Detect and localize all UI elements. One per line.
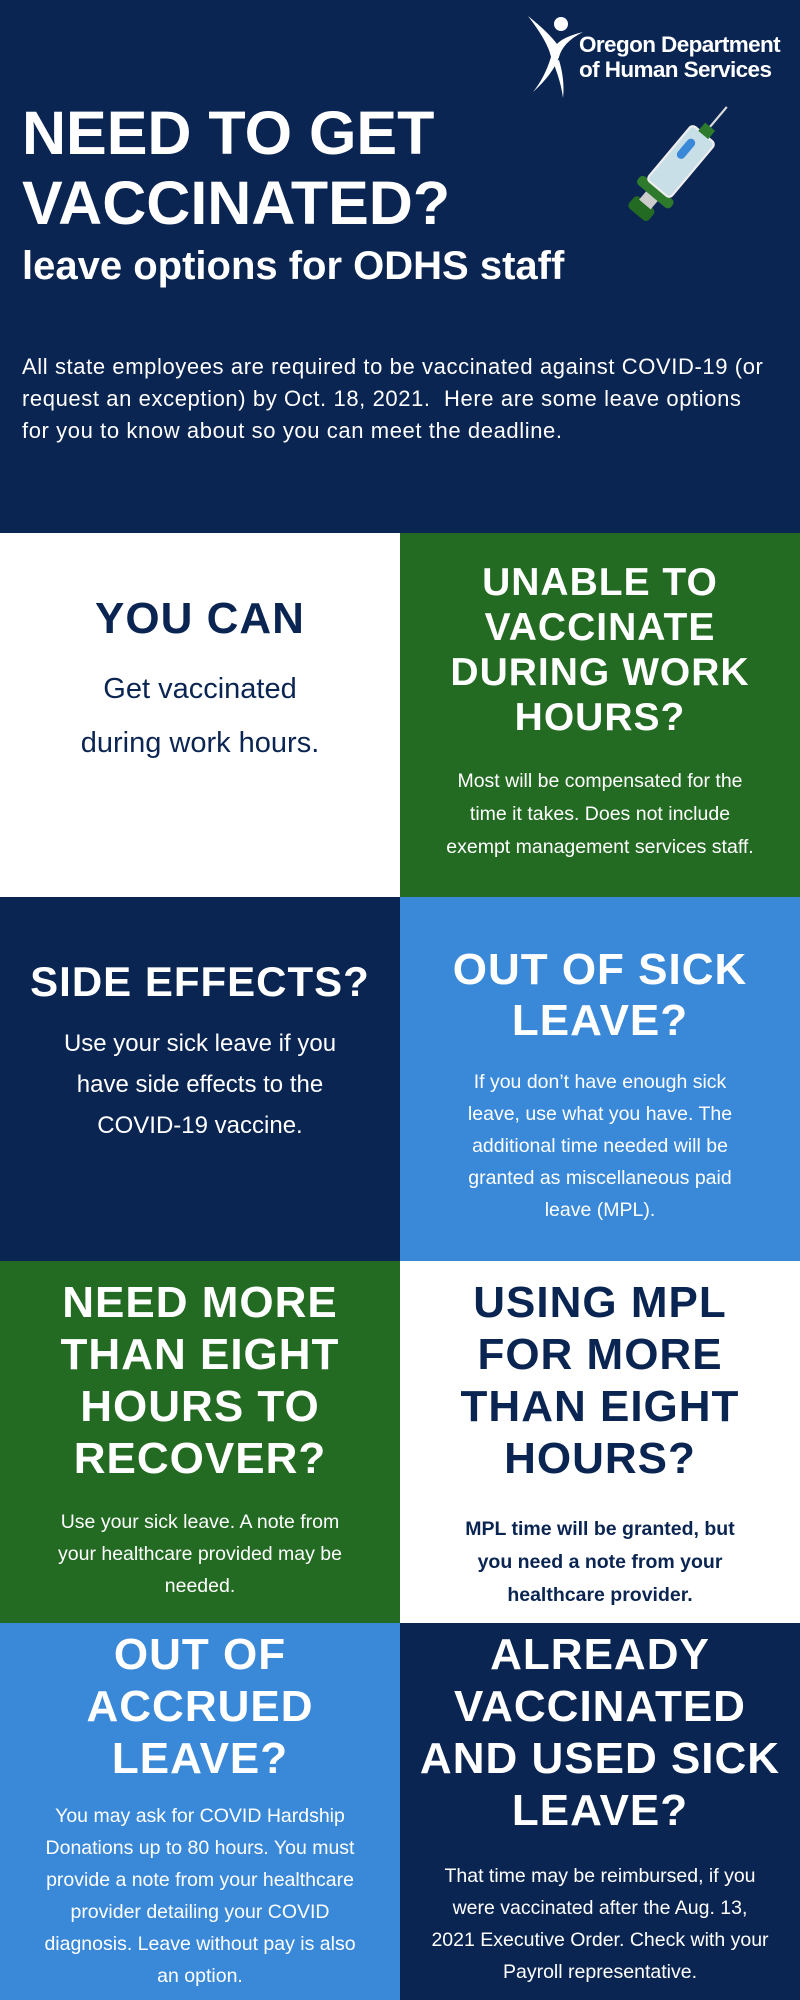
panel: out of accrued leave: provide a note from your healthcare <box>46 1869 354 1891</box>
panel: out of sick leave: leave (MPL). <box>545 1199 655 1221</box>
panel: out of sick leave: additional time needed will be <box>472 1135 728 1157</box>
panel: out of sick leave: If you don’t have enough sick <box>474 1071 726 1093</box>
logo: Oregon Department <box>579 32 780 57</box>
subtitle: leave options for ODHS staff <box>22 244 564 288</box>
panel: out of accrued leave: ACCRUED <box>86 1682 314 1731</box>
panel: out of sick leave <box>400 897 800 1261</box>
panel: out of sick leave: LEAVE? <box>512 996 688 1045</box>
panel: out of accrued leave: an option. <box>157 1965 243 1987</box>
intro text <box>22 354 763 443</box>
panel: out of accrued leave: diagnosis. Leave without pay is also <box>44 1933 356 1955</box>
panel: need more than eight hours: THAN EIGHT <box>61 1330 339 1379</box>
title: VACCINATED? <box>22 169 450 237</box>
intro text: All state employees are required to be vaccinated against COVID-19 (or <box>22 354 763 379</box>
panel: need more than eight hours: your healthcare provided may be <box>58 1543 342 1565</box>
panel: out of sick leave: OUT OF SICK <box>453 945 747 994</box>
panel: unable to vaccinate: time it takes. Does not include <box>470 803 730 825</box>
panel: need more than eight hours <box>0 1261 400 1623</box>
panel: using mpl: FOR MORE <box>477 1330 723 1379</box>
panel: you can: YOU CAN <box>95 594 305 643</box>
panel: unable to vaccinate: exempt management services staff. <box>446 836 754 858</box>
logo: of Human Services <box>579 57 771 82</box>
title: NEED TO GET <box>22 99 434 167</box>
panel: side effects: Use your sick leave if you <box>64 1030 336 1057</box>
panel: using mpl: healthcare provider. <box>507 1584 693 1606</box>
panel: out of accrued leave: provider detailing your COVID <box>70 1901 330 1923</box>
panel: already vaccinated: were vaccinated after the Aug. 13, <box>453 1897 747 1919</box>
panel: unable to vaccinate <box>400 533 800 897</box>
panel: already vaccinated: 2021 Executive Order. Check with your <box>431 1929 769 1951</box>
panel: unable to vaccinate: DURING WORK <box>450 651 750 694</box>
intro text: for you to know about so you can meet the deadline. <box>22 418 563 443</box>
panel: unable to vaccinate: Most will be compensated for the <box>457 770 743 792</box>
panel: out of accrued leave: OUT OF <box>114 1630 286 1679</box>
panel: you can <box>0 533 400 897</box>
panel: you can: during work hours. <box>81 727 319 759</box>
header <box>0 0 800 533</box>
panel: need more than eight hours: Use your sick leave. A note from <box>61 1511 339 1533</box>
panel: you can: Get vaccinated <box>103 673 297 705</box>
panel: side effects: COVID-19 vaccine. <box>97 1112 303 1139</box>
panel: using mpl: THAN EIGHT <box>461 1382 739 1431</box>
icon: syringe <box>628 106 728 221</box>
panel: using mpl: USING MPL <box>473 1278 727 1327</box>
panel: using mpl: HOURS? <box>504 1434 696 1483</box>
panel: out of accrued leave: Donations up to 80 hours. You must <box>46 1837 354 1859</box>
logo <box>528 16 780 98</box>
panel: out of sick leave: granted as miscellaneous paid <box>468 1167 732 1189</box>
panel: side effects: SIDE EFFECTS? <box>30 958 370 1005</box>
intro text: request an exception) by Oct. 18, 2021. Here are some leave options <box>22 386 742 411</box>
panel: already vaccinated: ALREADY <box>490 1630 710 1679</box>
panel: need more than eight hours: HOURS TO <box>80 1382 320 1431</box>
panel: out of sick leave: leave, use what you have. The <box>468 1103 732 1125</box>
panel: already vaccinated: AND USED SICK <box>420 1734 780 1783</box>
panel: need more than eight hours: NEED MORE <box>62 1278 338 1327</box>
panel: need more than eight hours: needed. <box>165 1575 235 1597</box>
panel: unable to vaccinate: UNABLE TO <box>482 561 718 604</box>
panel: side effects: have side effects to the <box>77 1071 323 1098</box>
panel: already vaccinated: LEAVE? <box>512 1786 688 1835</box>
panel: already vaccinated: Payroll representative. <box>503 1961 697 1983</box>
panel: using mpl: MPL time will be granted, but <box>465 1518 735 1540</box>
panel: already vaccinated <box>400 1623 800 2000</box>
panel: out of accrued leave <box>0 1623 400 2000</box>
panel: out of accrued leave: LEAVE? <box>112 1734 288 1783</box>
panel: already vaccinated: That time may be reimbursed, if you <box>444 1865 756 1887</box>
panel: already vaccinated: VACCINATED <box>454 1682 746 1731</box>
panel: using mpl <box>400 1261 800 1623</box>
panel: unable to vaccinate: HOURS? <box>515 696 685 739</box>
panel: need more than eight hours: RECOVER? <box>74 1434 326 1483</box>
panel: out of accrued leave: You may ask for COVID Hardship <box>55 1805 345 1827</box>
title <box>22 99 450 237</box>
panel: unable to vaccinate: VACCINATE <box>485 606 715 649</box>
panel: using mpl: you need a note from your <box>478 1551 722 1573</box>
panel: side effects <box>0 897 400 1261</box>
